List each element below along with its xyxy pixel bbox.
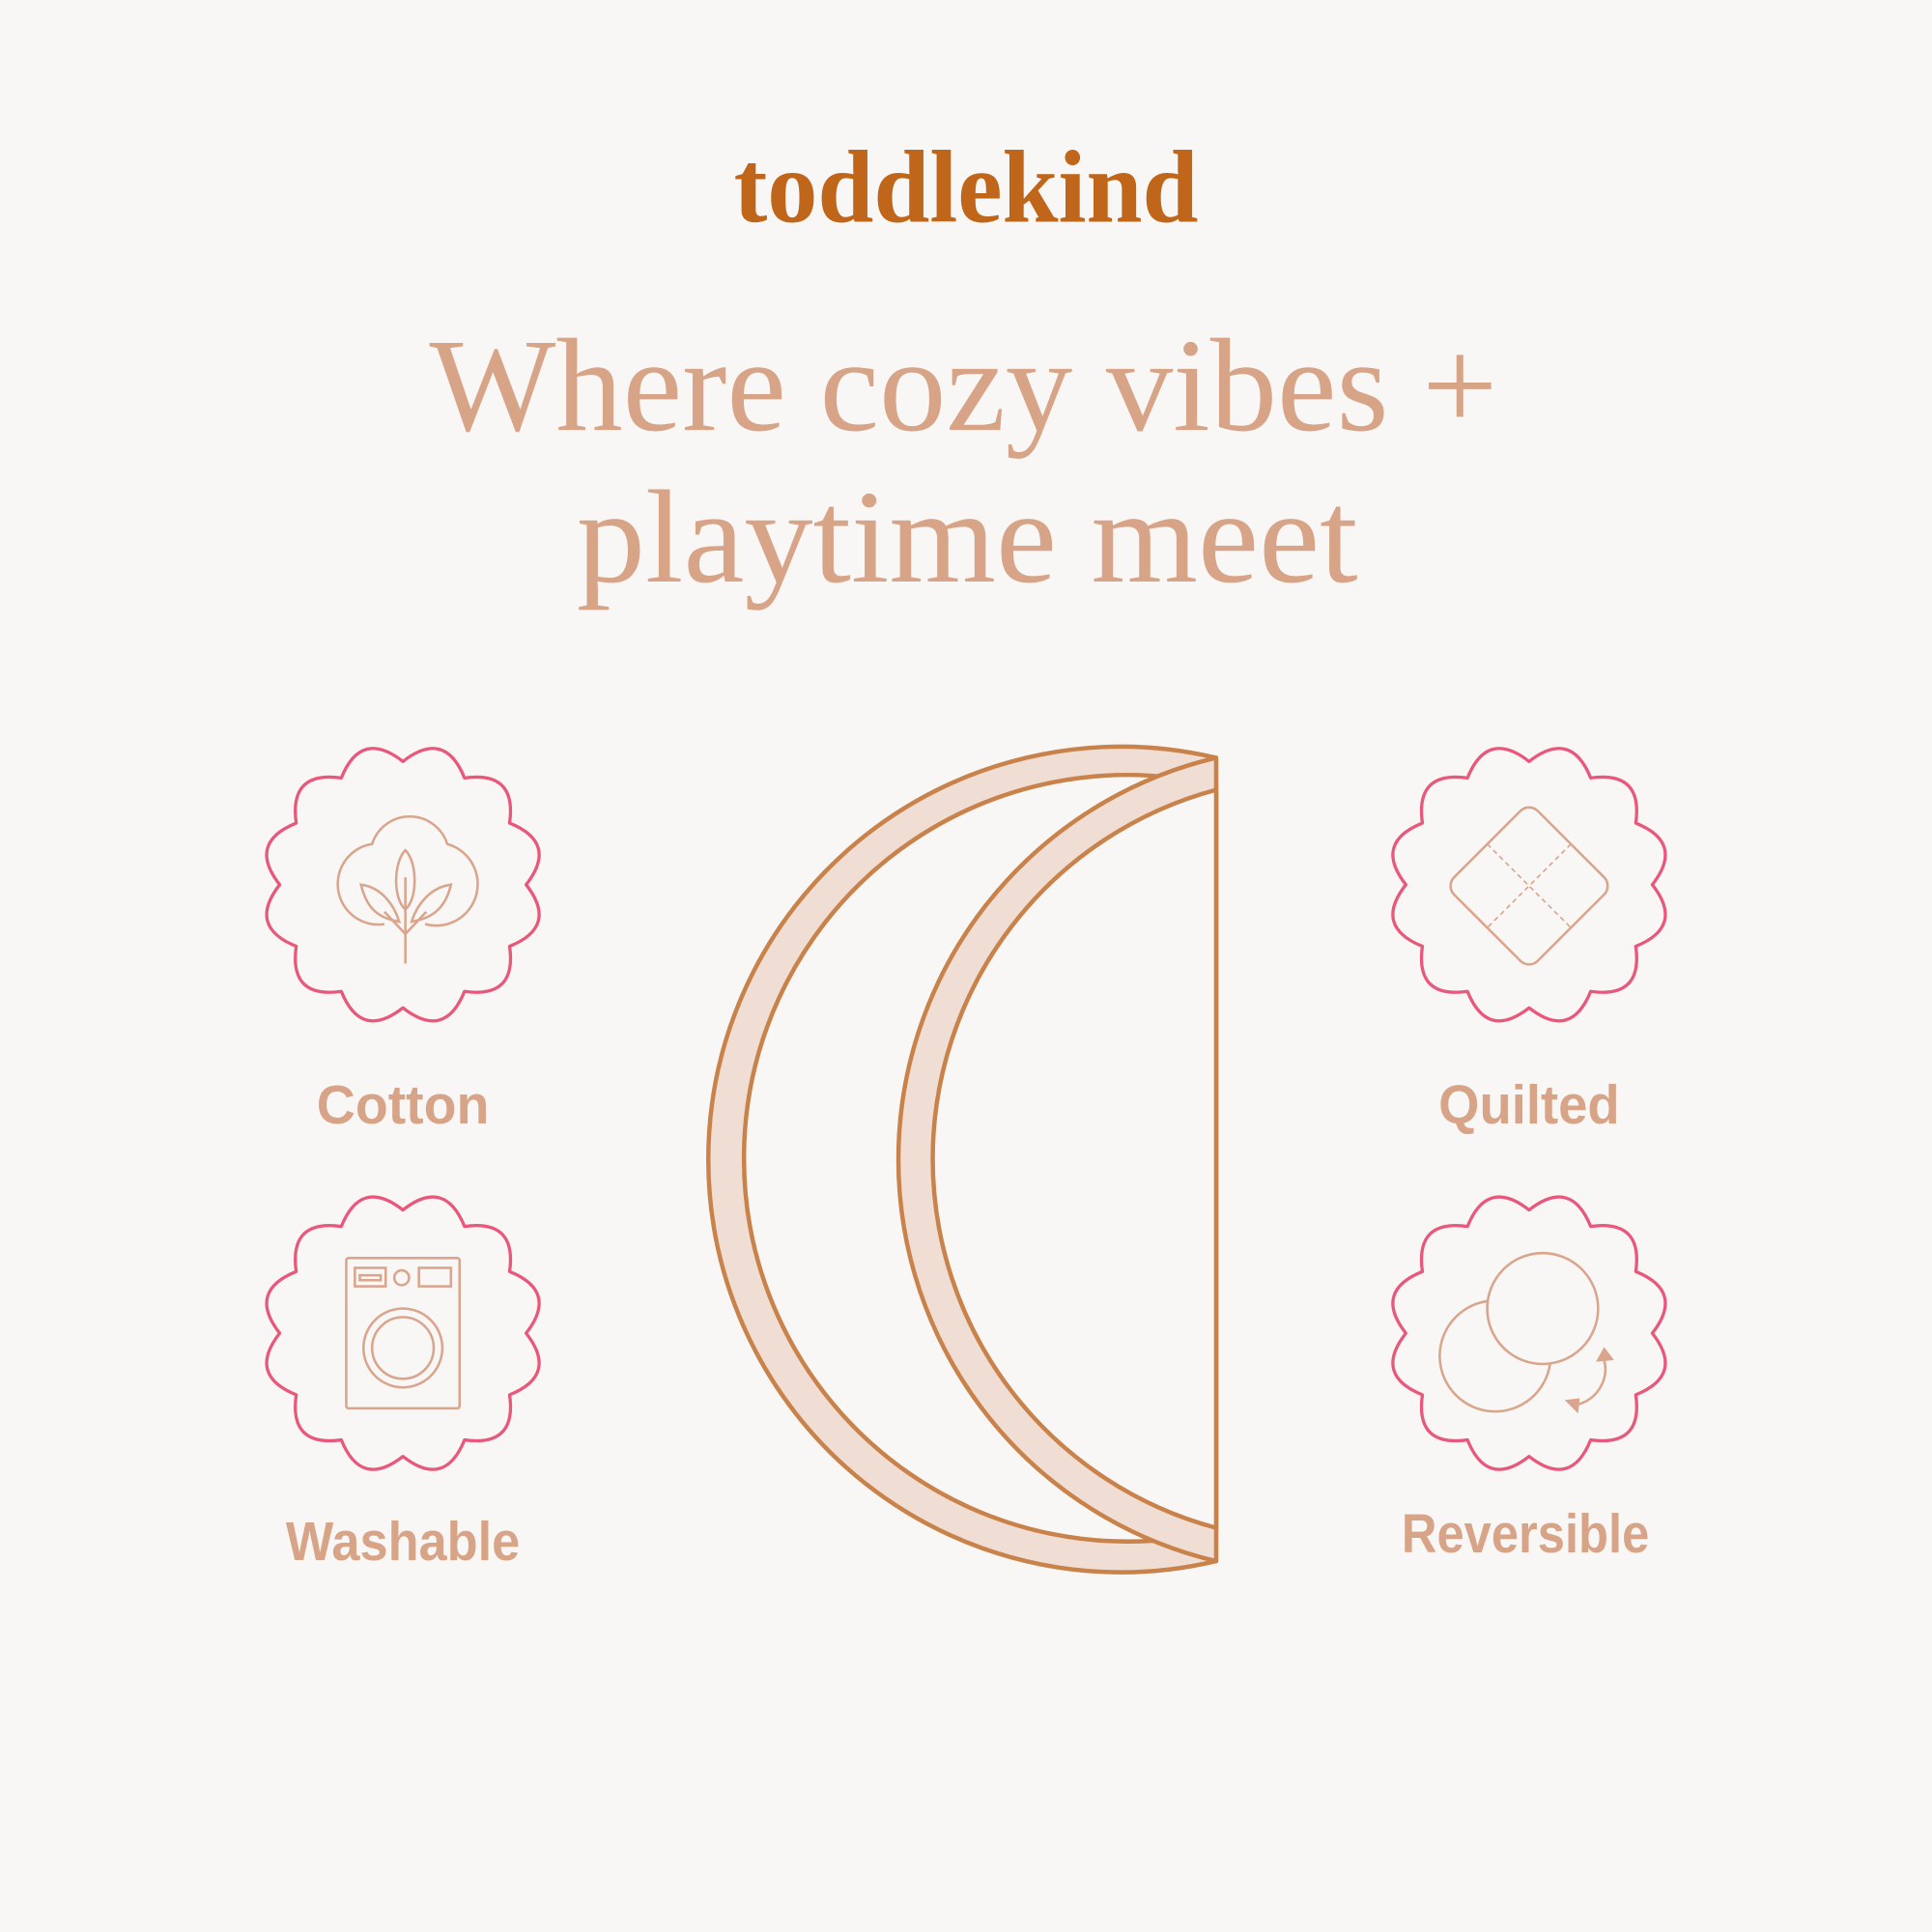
label: cotton: Cotton bbox=[317, 1074, 489, 1135]
badge: reversible bbox=[1393, 1197, 1665, 1469]
icon: cotton plant bbox=[338, 816, 478, 963]
label: washable: Washable bbox=[286, 1511, 520, 1572]
icon: washing machine bbox=[346, 1258, 460, 1408]
moon illustration bbox=[708, 747, 1216, 1573]
title bbox=[430, 311, 1497, 611]
icon: quilted square bbox=[1445, 803, 1612, 970]
title: playtime meet bbox=[577, 463, 1358, 611]
badge: cotton bbox=[267, 749, 539, 1021]
badge: washable bbox=[267, 1197, 539, 1469]
label: quilted: Quilted bbox=[1438, 1074, 1620, 1135]
title: Where cozy vibes + bbox=[430, 311, 1497, 459]
icon: reversible circles bbox=[1439, 1253, 1611, 1411]
badge: quilted bbox=[1393, 749, 1665, 1021]
logo: toddlekind bbox=[734, 131, 1198, 245]
label: reversible: Reversible bbox=[1402, 1503, 1649, 1564]
